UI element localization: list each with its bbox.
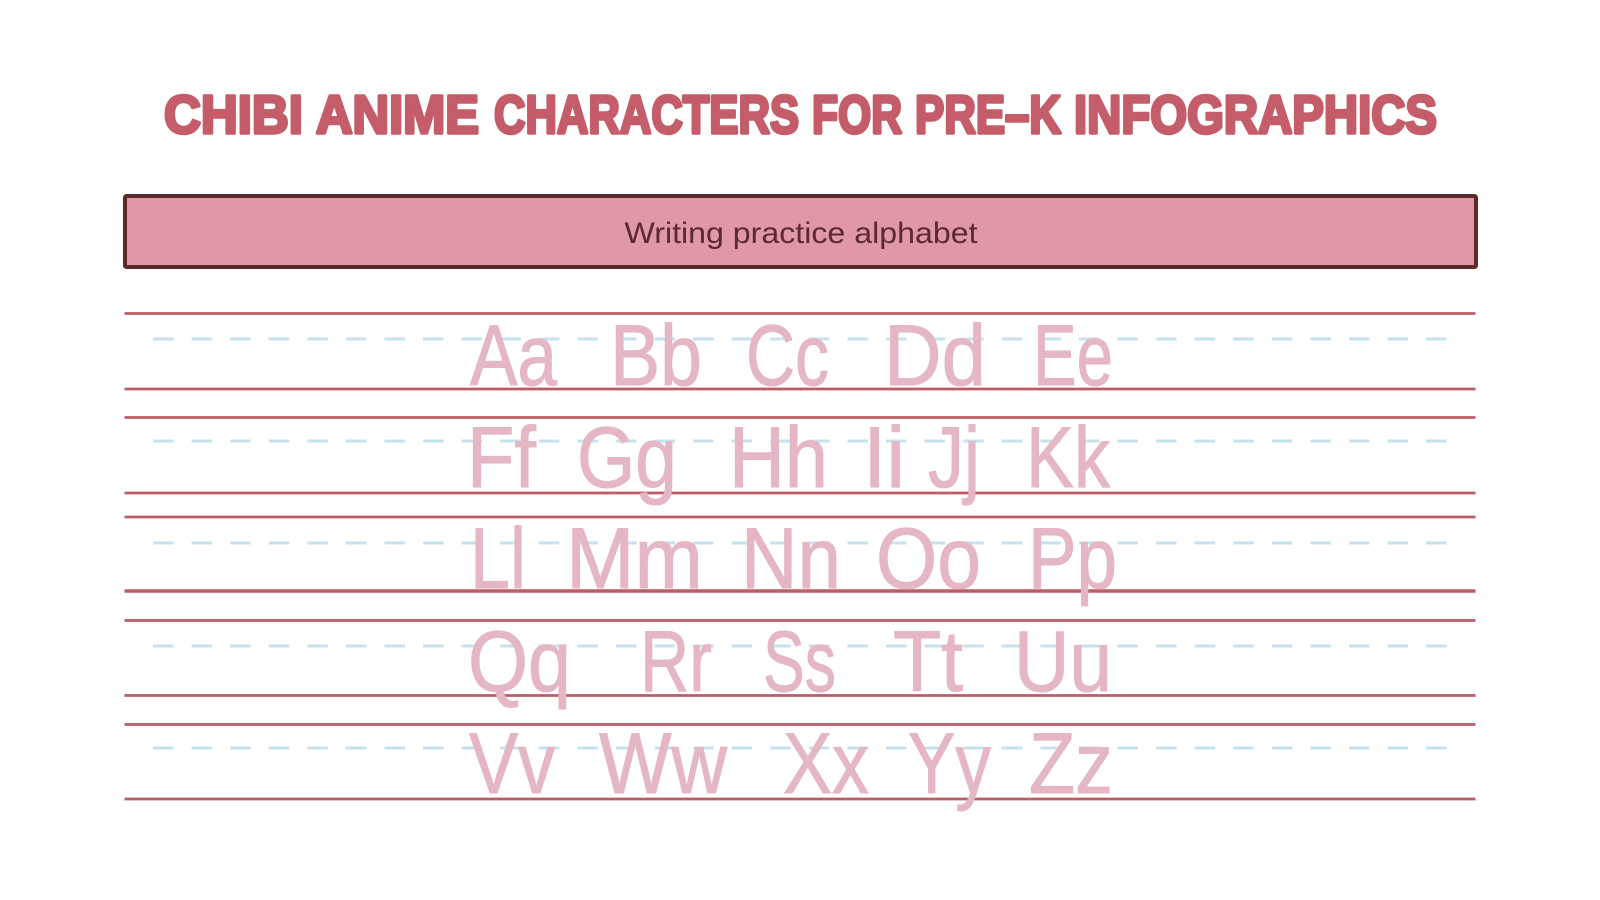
alphabet row: Q to U: Qq [468,614,571,710]
alphabet row: L to P: Ll [470,511,526,607]
title: INFOGRAPHICS [1074,85,1437,145]
alphabet row: Q to U: Ss [763,614,836,710]
alphabet row: F to K [467,410,1111,506]
alphabet row: L to P [470,511,1117,607]
title: FOR [812,85,902,145]
alphabet row: Q to U: Tt [893,614,963,710]
alphabet row: A to E: Ee [1033,308,1113,404]
alphabet row: F to K: Ii [863,410,905,506]
alphabet row: A to E: Aa [470,308,557,404]
alphabet row: V to Z [469,716,1113,812]
alphabet row: V to Z: Yy [908,716,991,812]
alphabet row: L to P: Oo [876,511,981,607]
title: PRE–K [915,85,1061,145]
alphabet row: Q to U [468,614,1112,710]
alphabet row: Q to U: Rr [640,614,712,710]
alphabet row: F to K: Hh [729,410,828,506]
alphabet row: F to K: Ff [467,410,537,506]
alphabet row: F to K: Gg [577,410,677,506]
alphabet row: V to Z: Vv [469,716,555,812]
title [164,85,1437,145]
alphabet row: L to P: Mm [566,511,703,607]
alphabet row: A to E: Bb [610,308,702,404]
alphabet row: F to K: Jj [928,410,980,506]
alphabet row: F to K: Kk [1026,410,1111,506]
alphabet row: L to P: Pp [1028,511,1117,607]
alphabet row: A to E [470,308,1113,404]
banner: writing practice alphabet: Writing practice alphabet [624,217,978,250]
banner: writing practice alphabet [125,196,1476,267]
alphabet row: Q to U: Uu [1014,614,1112,710]
alphabet row: V to Z: Xx [783,716,869,812]
title: ANIME [316,85,479,145]
alphabet row: V to Z: Zz [1029,716,1113,812]
alphabet row: V to Z: Ww [599,716,728,812]
writing guide lines [124,314,1476,799]
alphabet row: A to E: Cc [746,308,829,404]
alphabet row: L to P: Nn [741,511,841,607]
title: CHIBI [164,85,303,145]
title: CHARACTERS [494,85,799,145]
alphabet row: A to E: Dd [884,308,986,404]
